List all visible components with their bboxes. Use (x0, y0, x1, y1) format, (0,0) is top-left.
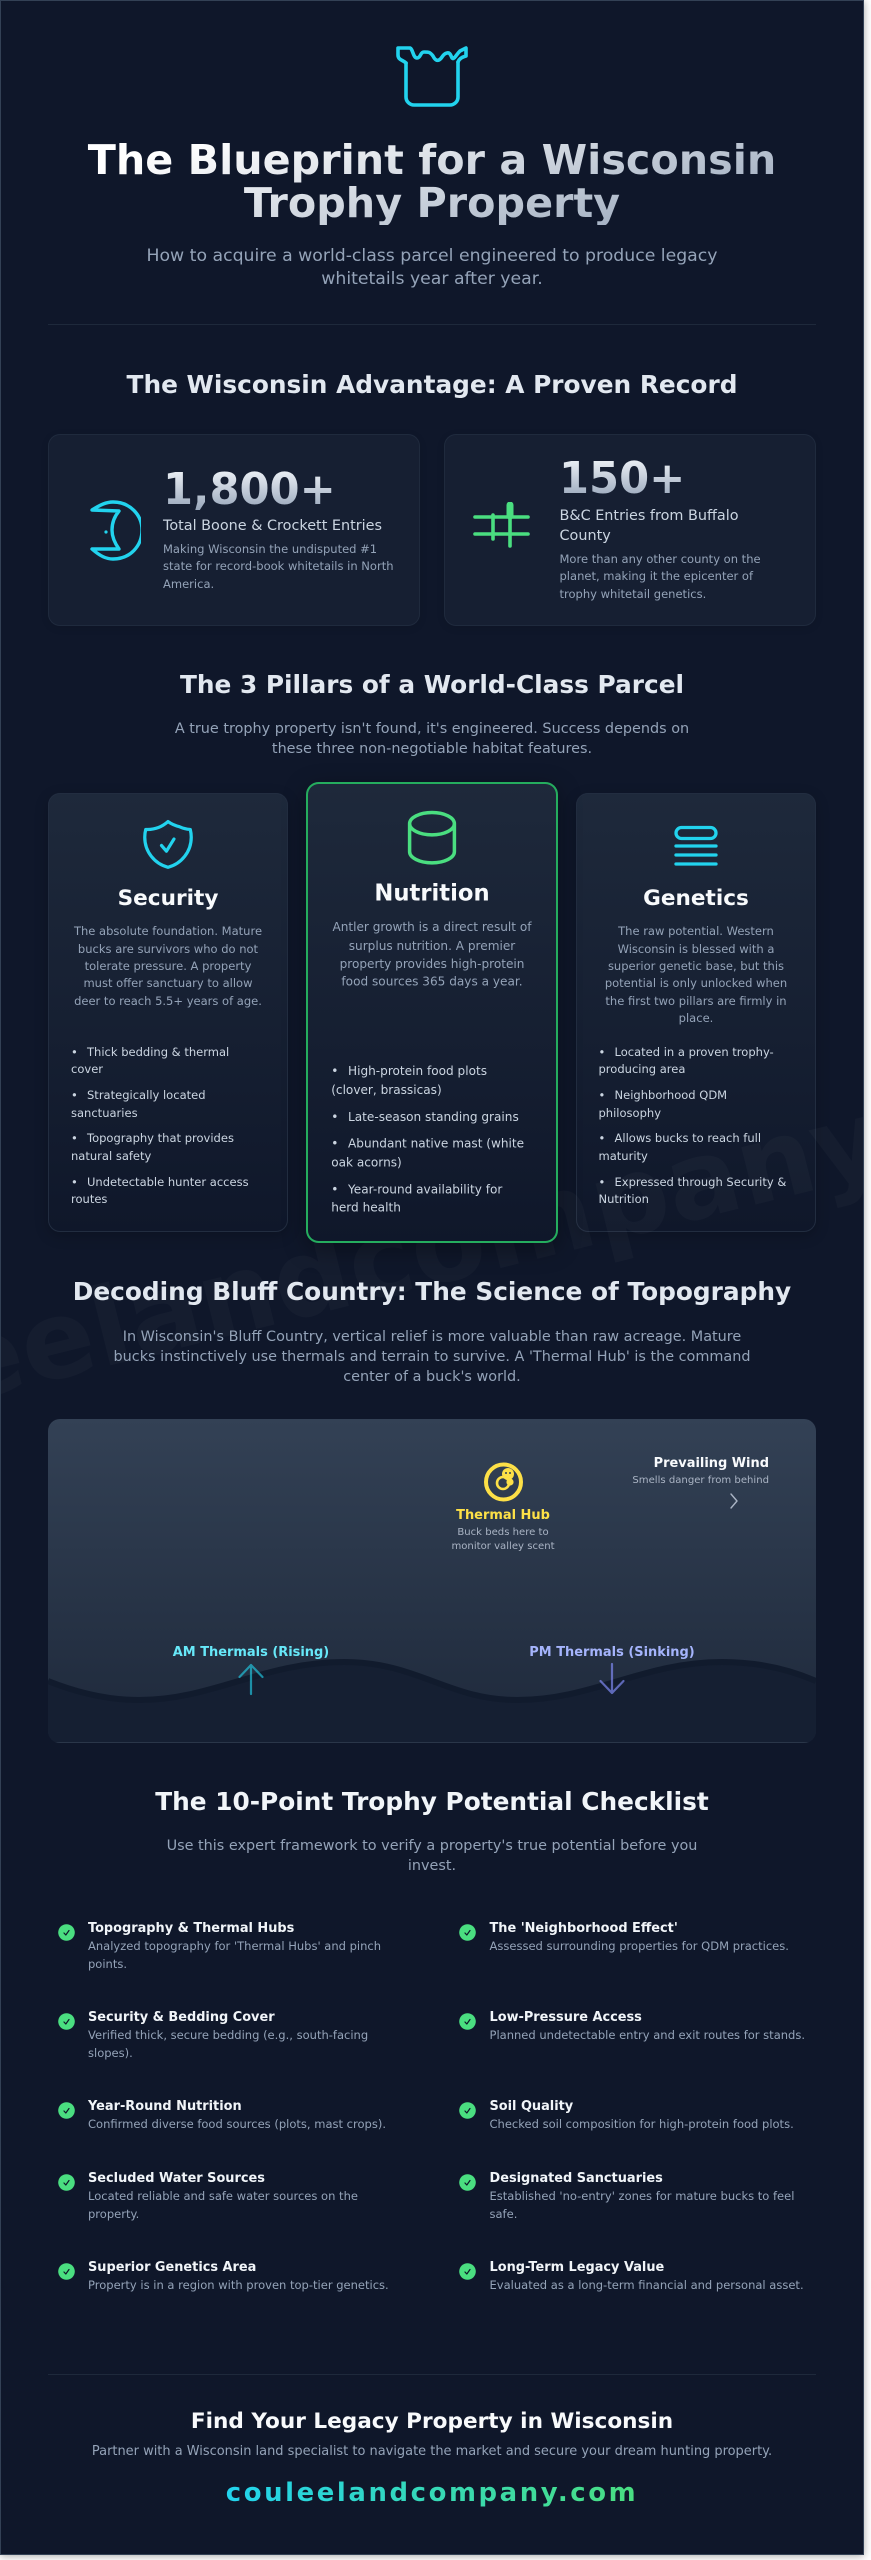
stat description: trophy whitetail genetics. (560, 587, 706, 601)
stat label: County (560, 528, 611, 544)
panel: security pillar (48, 793, 288, 1232)
arrow: rising (238, 1664, 264, 1696)
pillar description: bucks are survivors who do not (78, 942, 258, 956)
prevailing wind note: Smells danger from behind (632, 1475, 769, 1486)
checklist item 2: The 'Neighborhood Effect' (490, 1920, 678, 1936)
icon: wind chevron (730, 1493, 738, 1509)
pillar description: Antler growth is a direct result of (332, 920, 532, 935)
icon: stacked bars (674, 826, 718, 866)
pillars intro text (175, 721, 689, 757)
pillar feature list: • (71, 1045, 78, 1059)
pillar feature list: • (598, 1045, 605, 1059)
heading: three pillars: The 3 Pillars of a World-Class Parcel (180, 670, 684, 699)
pillar feature list: cover (71, 1062, 103, 1076)
checklist item 9: Superior Genetics Area (88, 2260, 256, 2274)
pillar heading: Nutrition (374, 881, 490, 907)
pillar feature list: Thick bedding & thermal (87, 1045, 229, 1059)
thermal hub note: Buck beds here to (457, 1527, 549, 1538)
pillar feature list: • (598, 1088, 605, 1102)
pillar feature list: herd health (331, 1200, 401, 1215)
icon: cylinder (408, 810, 456, 865)
pillar feature list: oak acorns) (331, 1155, 402, 1169)
arrow: sinking (599, 1662, 625, 1694)
pillar feature list: Abundant native mast (white (348, 1136, 524, 1151)
checklist item 4 (459, 2010, 805, 2042)
stat description: More than any other county on the (560, 552, 761, 566)
pillar feature list: Topography that provides (87, 1131, 234, 1145)
checklist item 1 (58, 1920, 381, 1971)
heading: bluff country: Decoding Bluff Country: The Science of Topography (73, 1277, 791, 1306)
checklist item 9 (58, 2260, 389, 2292)
subtitle: whitetails year after year. (321, 269, 543, 289)
pillar feature list: High-protein food plots (348, 1064, 487, 1079)
checklist item 10: Long-Term Legacy Value (490, 2260, 664, 2274)
pillar feature list: philosophy (598, 1106, 661, 1120)
panel: topography diagram (48, 1419, 816, 1743)
checklist item 5 (58, 2098, 386, 2131)
checklist item 6 (459, 2098, 794, 2131)
checklist item 6: Soil Quality (490, 2098, 573, 2114)
checklist item 8: Designated Sanctuaries (490, 2170, 663, 2186)
pillar description: The absolute foundation. Mature (74, 924, 262, 938)
checklist item 7: Located reliable and safe water sources on the (88, 2189, 358, 2203)
pillar feature list (598, 1045, 786, 1206)
thermal hub note (451, 1527, 555, 1552)
stat label (560, 508, 739, 544)
subtitle (147, 246, 717, 289)
stat description: state for record-book whitetails in North (163, 559, 394, 573)
pillar feature list: • (331, 1136, 338, 1151)
pillars intro text: these three non-negotiable habitat features. (272, 741, 592, 757)
stat number: 150+ (559, 454, 685, 504)
pillar feature list: Allows bucks to reach full (614, 1131, 761, 1145)
pillar description: potential is only unlocked when (605, 976, 787, 990)
stat label: Total Boone & Crockett Entries (163, 518, 382, 534)
pillar feature list: Nutrition (598, 1192, 649, 1206)
pillar feature list: • (71, 1131, 78, 1145)
panel: genetics pillar (576, 793, 816, 1232)
pillar heading: Security (118, 886, 218, 911)
stat description: planet, making it the epicenter of (560, 569, 753, 583)
pillar feature list (71, 1045, 249, 1206)
checklist item 1: Topography & Thermal Hubs (88, 1920, 294, 1936)
panel: stat 150+ (444, 434, 816, 626)
title: The Blueprint for a Wisconsin (88, 136, 776, 184)
footer text: Partner with a Wisconsin land specialist to navigate the market and secure your dream hunting property. (92, 2444, 772, 2458)
pillar feature list: Year-round availability for (348, 1182, 502, 1196)
panel: stat 1,800+ (48, 434, 420, 626)
pillar feature list: • (71, 1088, 78, 1102)
pillar feature list: • (331, 1109, 338, 1124)
pillar feature list: Expressed through Security & (614, 1175, 786, 1189)
title: Trophy Property (244, 179, 620, 227)
checklist item 7: Secluded Water Sources (88, 2170, 265, 2186)
pillar feature list: natural safety (71, 1149, 151, 1163)
bluff country intro text: bucks instinctively use thermals and terrain to survive. A 'Thermal Hub' is the command (114, 1348, 750, 1364)
checklist item 8: Established 'no-entry' zones for mature bucks to feel (490, 2189, 794, 2203)
pillar feature list: • (331, 1182, 338, 1196)
pillar description: place. (679, 1011, 713, 1025)
pillar feature list: • (598, 1175, 605, 1189)
checklist item 7: property. (88, 2207, 139, 2221)
icon: crescent (90, 500, 141, 561)
pillars intro text: A true trophy property isn't found, it's engineered. Success depends on (175, 721, 689, 737)
checklist item 3: Verified thick, secure bedding (e.g., south-facing (88, 2028, 368, 2042)
stat description (163, 542, 394, 591)
pillar description: the first two pillars are firmly in (605, 994, 787, 1008)
icon: grid (473, 502, 530, 548)
checklist item 8: safe. (490, 2207, 517, 2221)
stat description (560, 552, 761, 601)
pillar feature list: sanctuaries (71, 1106, 138, 1120)
checklist item 10: Evaluated as a long-term financial and personal asset. (490, 2278, 804, 2292)
pillar description: tolerate pressure. A property (85, 959, 251, 973)
checklist item 1: points. (88, 1957, 127, 1971)
pillar feature list: (clover, brassicas) (331, 1082, 442, 1097)
stat number: 1,800+ (163, 465, 336, 515)
pillar heading: Genetics (643, 886, 749, 911)
pillar description (605, 924, 787, 1025)
checklist item 9: Property is in a region with proven top-tier genetics. (88, 2278, 389, 2292)
pillar feature list: Strategically located (87, 1088, 206, 1102)
pillar description: The raw potential. Western (618, 924, 774, 938)
pillar description: superior genetic base, but this (608, 959, 784, 973)
heading: wisconsin advantage: The Wisconsin Advantage: A Proven Record (127, 370, 737, 399)
subtitle: How to acquire a world-class parcel engineered to produce legacy (147, 246, 717, 266)
stat label: B&C Entries from Buffalo (560, 508, 739, 524)
pillar feature list: routes (71, 1192, 107, 1206)
checklist item 3: Security & Bedding Cover (88, 2010, 275, 2024)
checklist item 3 (58, 2010, 368, 2060)
bluff country intro text: In Wisconsin's Bluff Country, vertical relief is more valuable than raw acreage. Mature (123, 1328, 741, 1344)
pillar feature list (331, 1064, 524, 1215)
stat description: America. (163, 577, 214, 591)
checklist item 1: Analyzed topography for 'Thermal Hubs' and pinch (88, 1939, 381, 1953)
pillar feature list: • (598, 1131, 605, 1145)
checklist intro text: invest. (408, 1858, 456, 1874)
checklist item 4: Planned undetectable entry and exit routes for stands. (490, 2028, 805, 2042)
checklist item 7 (58, 2170, 358, 2221)
icon: thermal hub (484, 1462, 523, 1502)
icon: antler crown (396, 46, 468, 107)
pillar description: Wisconsin is blessed with a (618, 942, 774, 956)
title (48, 139, 816, 225)
footer url: couleelandcompany.com (226, 2478, 638, 2508)
stat description: Making Wisconsin the undisputed #1 (163, 542, 377, 556)
bluff country intro text (114, 1328, 750, 1384)
pillar description: food sources 365 days a year. (341, 974, 523, 989)
checklist item 4: Low-Pressure Access (490, 2010, 642, 2024)
pillar description: surplus nutrition. A premier (349, 938, 515, 953)
checklist item 2: Assessed surrounding properties for QDM practices. (490, 1939, 789, 1953)
pillar feature list: Located in a proven trophy- (614, 1045, 774, 1059)
pillar description: must offer sanctuary to allow (83, 976, 253, 990)
prevailing wind label: Prevailing Wind (654, 1456, 769, 1470)
terrain ridge line (48, 1659, 816, 1743)
pillar feature list: maturity (598, 1149, 648, 1163)
pillar feature list: • (331, 1064, 338, 1079)
checklist item 5: Year-Round Nutrition (88, 2098, 242, 2114)
checklist intro text: Use this expert framework to verify a property's true potential before you (167, 1838, 697, 1854)
checklist item 2 (459, 1920, 789, 1953)
pillar feature list: producing area (598, 1062, 685, 1076)
icon: shield (143, 820, 193, 869)
thermal hub label: Thermal Hub (456, 1508, 550, 1522)
pillar feature list: Neighborhood QDM (614, 1088, 727, 1102)
footer heading: Find Your Legacy Property in Wisconsin (191, 2408, 673, 2434)
checklist item 3: slopes). (88, 2046, 133, 2060)
checklist item 10 (459, 2260, 804, 2292)
heading: checklist: The 10-Point Trophy Potential Checklist (155, 1787, 709, 1816)
pillar feature list: Undetectable hunter access (87, 1175, 249, 1189)
checklist intro text (167, 1838, 697, 1874)
pm thermals label: PM Thermals (Sinking) (529, 1644, 695, 1660)
pillar feature list: Late-season standing grains (348, 1109, 519, 1124)
pillar description: property provides high-protein (340, 956, 524, 971)
bluff country intro text: center of a buck's world. (343, 1368, 521, 1384)
pillar description (332, 920, 532, 989)
panel: nutrition pillar (306, 782, 558, 1243)
pillar description (74, 924, 262, 1008)
checklist item 8 (459, 2170, 794, 2221)
checklist item 6: Checked soil composition for high-protein food plots. (490, 2117, 794, 2131)
pillar feature list: • (71, 1175, 78, 1189)
am thermals label: AM Thermals (Rising) (173, 1644, 329, 1660)
thermal hub note: monitor valley scent (451, 1541, 555, 1552)
checklist item 5: Confirmed diverse food sources (plots, mast crops). (88, 2117, 386, 2131)
pillar description: deer to reach 5.5+ years of age. (74, 994, 262, 1008)
